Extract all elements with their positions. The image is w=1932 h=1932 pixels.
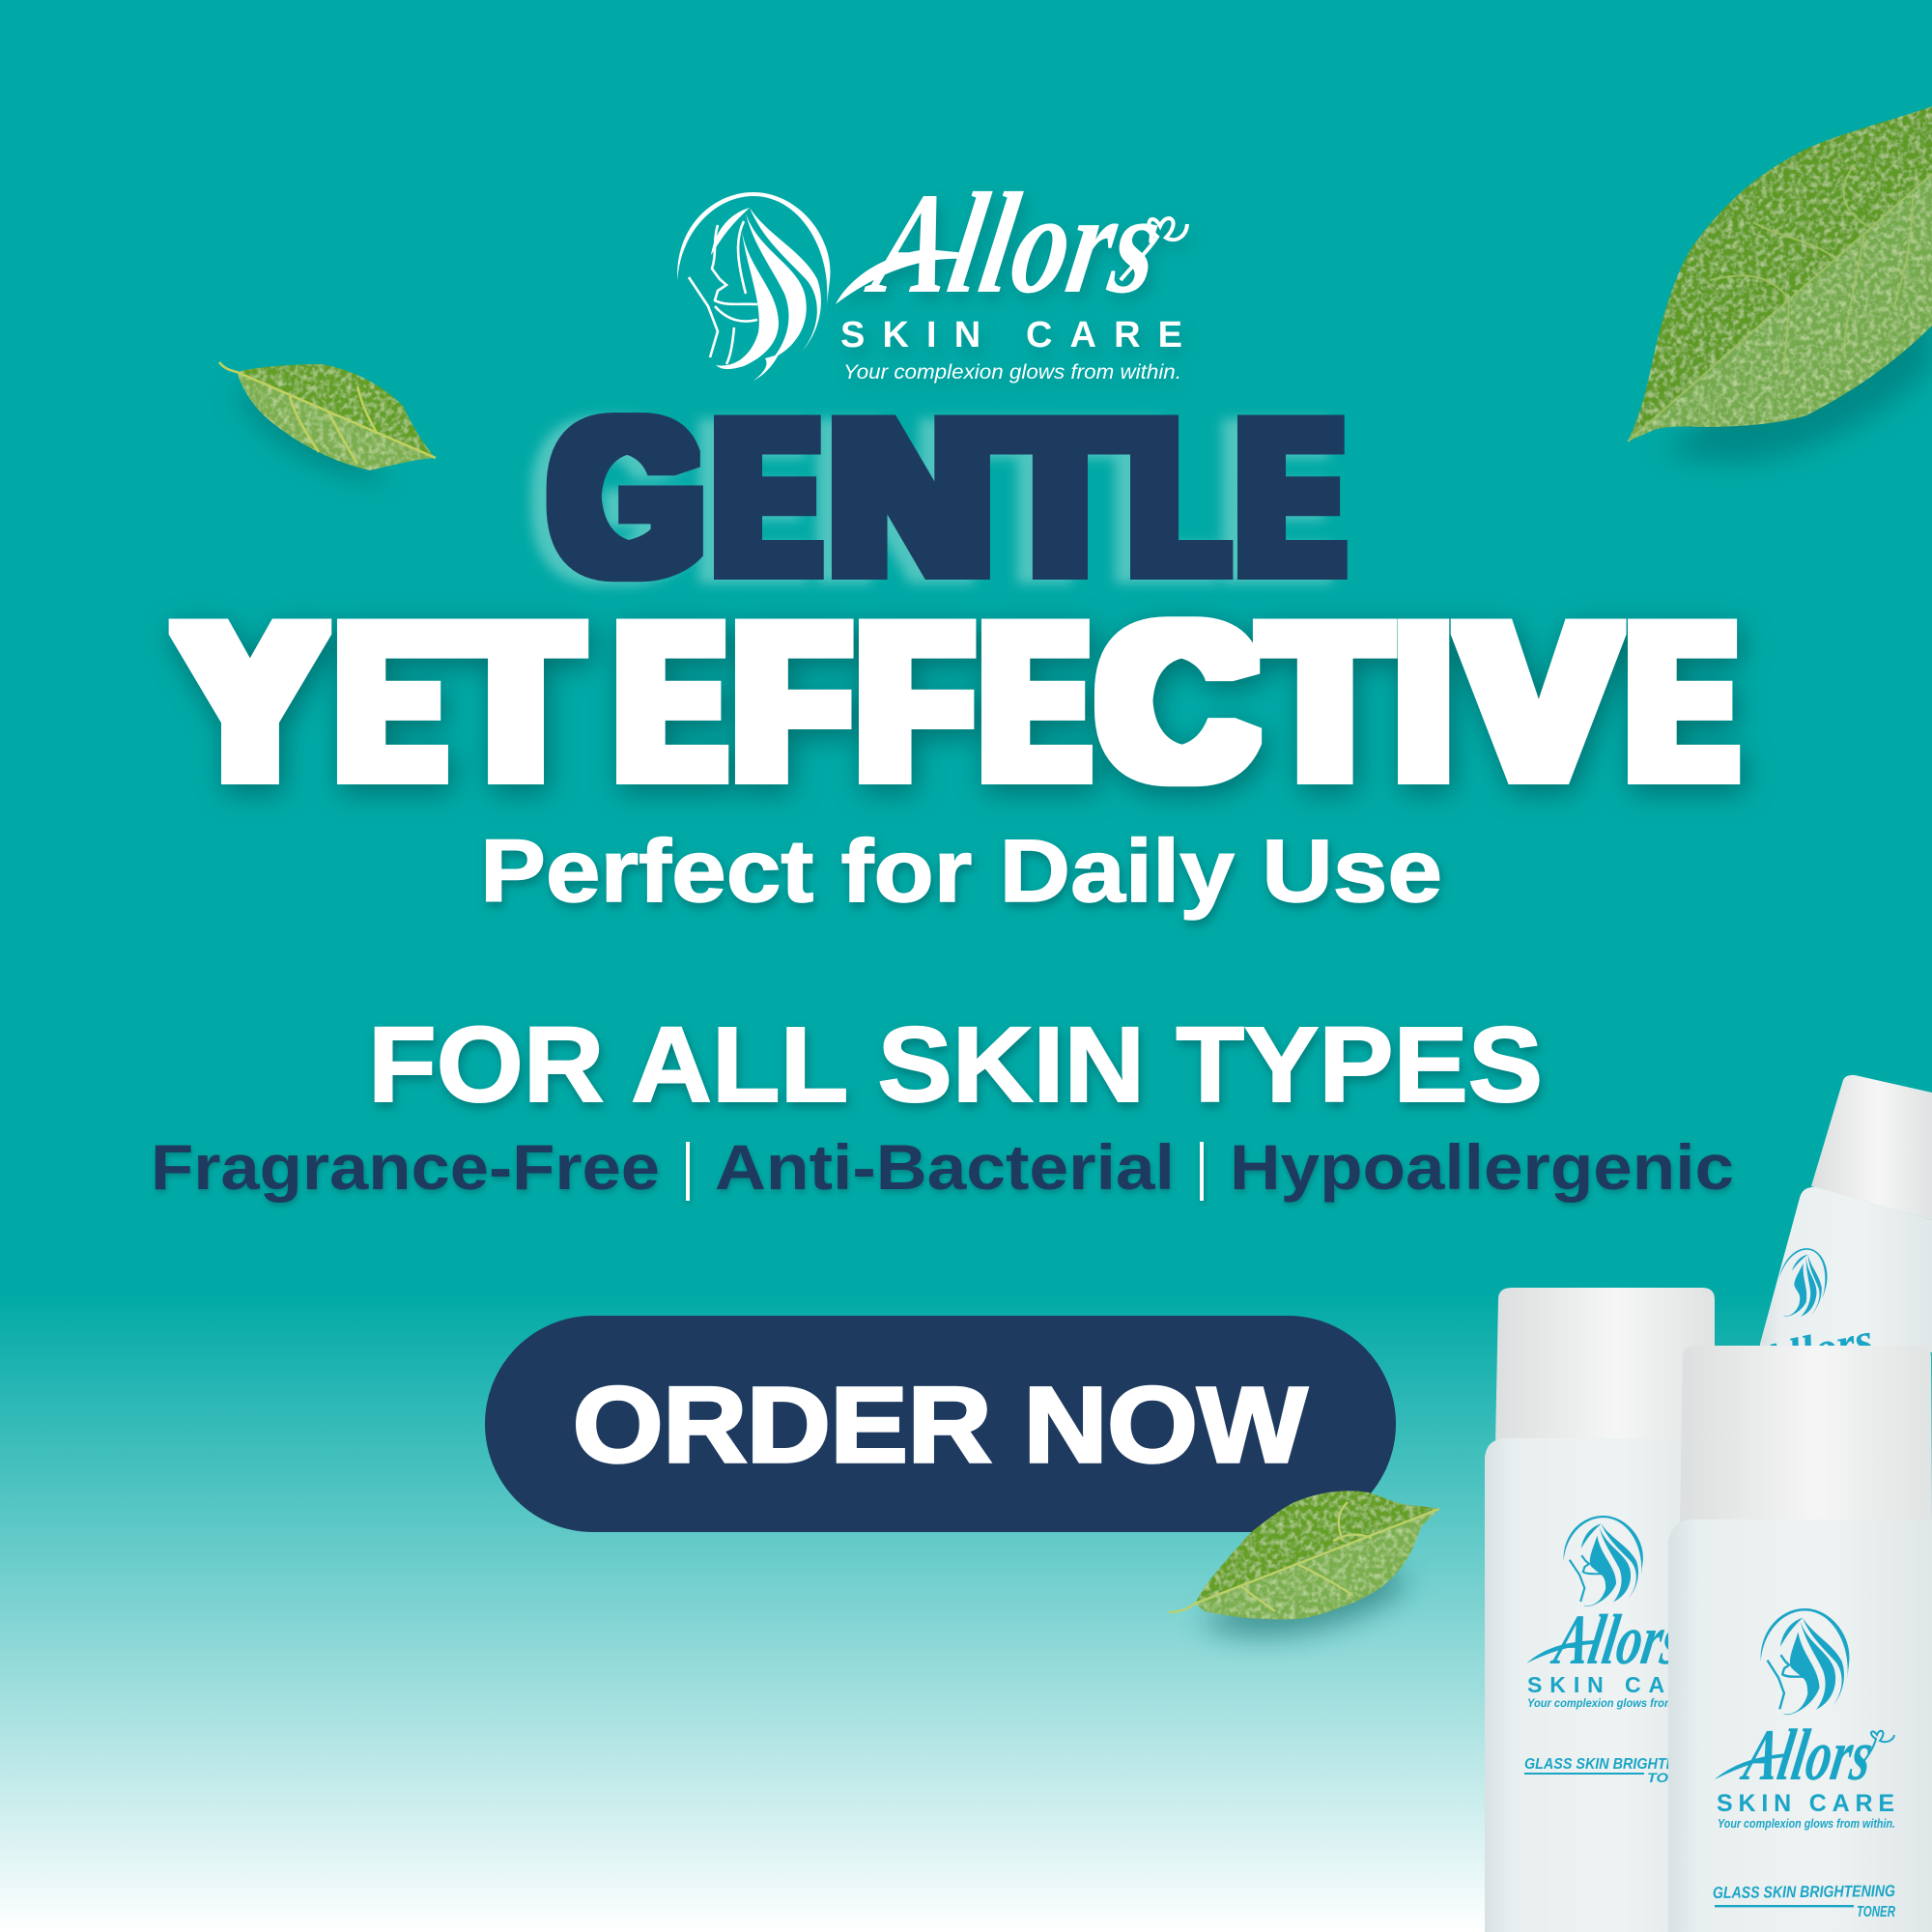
bottle: front xyxy=(1668,1346,1932,1932)
left bottle label: SKIN CARE xyxy=(1527,1672,1711,1697)
headline: YET EFFECTIVE: I xyxy=(1400,579,1447,823)
headline: YET EFFECTIVE: F xyxy=(861,579,969,823)
headline: GENTLE: N xyxy=(831,376,991,618)
left bottle label: TONER xyxy=(1647,1770,1702,1785)
leaf: on button xyxy=(1169,1491,1439,1636)
left bottle label xyxy=(1524,1516,1711,1785)
headline: YET EFFECTIVE: E xyxy=(341,579,440,823)
headline: GENTLE: E xyxy=(1241,376,1340,618)
product claims row xyxy=(151,1131,1734,1203)
front bottle label: Your complexion glows from within. xyxy=(1718,1817,1895,1831)
left bottle label: Allors xyxy=(1547,1601,1689,1680)
headline: YET EFFECTIVE: E xyxy=(620,579,721,823)
front bottle label: SKIN CARE xyxy=(1717,1790,1894,1817)
front bottle label: TONER xyxy=(1857,1904,1895,1920)
leaf: small top left xyxy=(219,362,436,483)
front bottle label: GLASS SKIN BRIGHTENING xyxy=(1713,1882,1895,1902)
logo wordmark: SKIN CARE xyxy=(840,315,1182,355)
product claims row: Hypoallergenic xyxy=(1230,1131,1734,1203)
headline: YET EFFECTIVE: T xyxy=(455,579,578,823)
headline: YET EFFECTIVE xyxy=(179,579,1732,823)
bottle: tilted back xyxy=(1750,1075,1932,1388)
logo wordmark: Your complexion glows from within. xyxy=(843,361,1181,384)
product claims row: Fragrance-Free xyxy=(151,1131,660,1203)
headline: YET EFFECTIVE: E xyxy=(985,579,1085,823)
left bottle label: Your complexion glows from within. xyxy=(1527,1698,1711,1710)
left bottle emblem xyxy=(1564,1516,1643,1606)
tilted bottle logo xyxy=(1772,1243,1833,1323)
front bottle emblem xyxy=(1761,1608,1849,1715)
headline: GENTLE xyxy=(552,376,1340,618)
front bottle label xyxy=(1713,1608,1895,1920)
headline: YET EFFECTIVE: F xyxy=(736,579,846,823)
subheading: FOR ALL SKIN TYPES: FOR ALL SKIN TYPES xyxy=(368,1006,1543,1124)
headline: GENTLE: E xyxy=(718,376,816,618)
bottle: left xyxy=(1485,1288,1715,1932)
headline: YET EFFECTIVE: T xyxy=(1264,579,1386,823)
logo xyxy=(677,162,1187,384)
logo wordmark xyxy=(836,162,1187,384)
leaf: top right xyxy=(1628,106,1932,464)
headline: YET EFFECTIVE: C xyxy=(1099,579,1254,823)
headline: YET EFFECTIVE: Y xyxy=(179,579,322,823)
left bottle label: GLASS SKIN BRIGHTENING xyxy=(1524,1756,1710,1773)
product claims row: Anti-Bacterial xyxy=(715,1131,1175,1203)
logo emblem: woman face and hair in circle xyxy=(677,192,830,381)
logo wordmark: Allors xyxy=(858,162,1173,324)
tilted bottle wordmark: Allors xyxy=(1750,1314,1878,1388)
call to action button: ORDER NOW xyxy=(573,1366,1307,1485)
subheading: Perfect for Daily Use: Perfect for Daily Use xyxy=(480,822,1442,921)
headline: YET EFFECTIVE: E xyxy=(1631,579,1732,823)
headline: GENTLE: L xyxy=(1134,376,1224,618)
headline: GENTLE: T xyxy=(1001,376,1120,618)
headline: GENTLE: G xyxy=(552,376,701,618)
headline: YET EFFECTIVE: V xyxy=(1463,579,1614,823)
call to action button xyxy=(485,1316,1396,1532)
front bottle label: Allors xyxy=(1736,1715,1879,1796)
